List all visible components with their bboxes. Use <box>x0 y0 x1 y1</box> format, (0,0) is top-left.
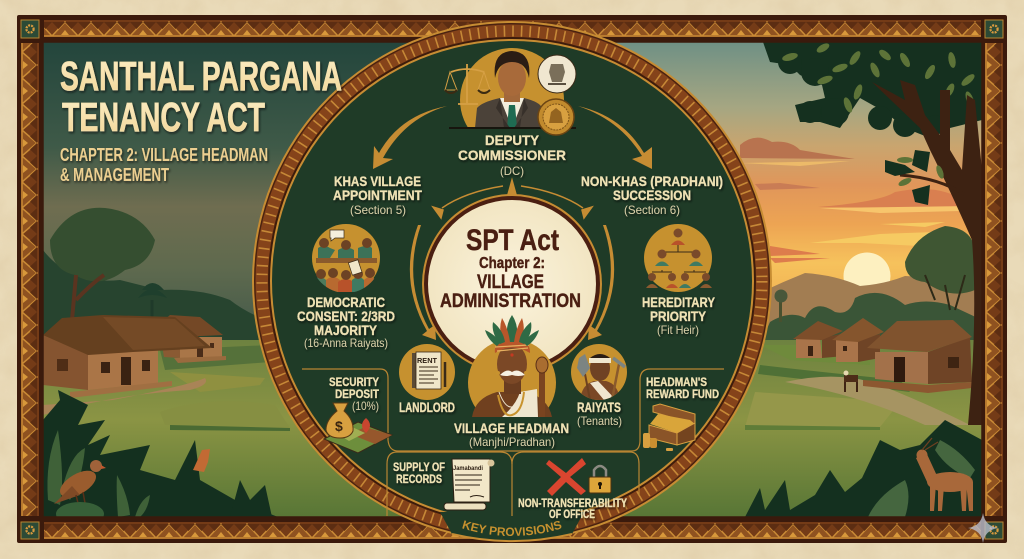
sun <box>844 252 890 286</box>
top pattern band <box>44 20 981 37</box>
label: reward fund <box>646 375 719 401</box>
ring <box>252 21 772 541</box>
provision: supply of records <box>393 459 494 510</box>
label: landlord: LANDLORD <box>399 400 455 415</box>
right main hut <box>863 320 972 393</box>
label: security deposit: SECURITY <box>329 375 379 389</box>
palm right <box>774 290 788 322</box>
label: khas village <box>333 174 423 217</box>
subtitle line one: CHAPTER 2: VILLAGE HEADMAN <box>60 145 268 165</box>
right pattern band <box>985 43 1003 516</box>
label: non-khas: NON-KHAS (PRADHANI) <box>581 174 723 189</box>
large tree canopy <box>763 41 982 138</box>
label: hereditary priority: HEREDITARY <box>642 295 715 310</box>
icon: democratic meeting <box>312 224 380 292</box>
label: security deposit <box>329 375 380 413</box>
central ornament and seal <box>422 180 602 374</box>
label: supply of records: SUPPLY OF <box>393 460 445 474</box>
label: village headman <box>454 421 569 449</box>
scene inner outline <box>43 42 982 517</box>
label: non-khas: (Section 6) <box>624 203 680 217</box>
provision: reward fund <box>643 375 719 451</box>
right hills <box>768 273 974 328</box>
label: raiyats: RAIYATS <box>577 400 621 415</box>
right tree line <box>765 292 974 340</box>
label: raiyats: (Tenants) <box>577 414 622 428</box>
label: non-khas <box>581 174 723 217</box>
landscape scene <box>43 41 982 526</box>
corner ornament top left <box>21 20 39 38</box>
icon: village headman <box>468 315 556 427</box>
title line two: TENANCY ACT <box>62 94 265 140</box>
label: security deposit: DEPOSIT <box>335 387 380 401</box>
right dirt path <box>785 377 970 425</box>
label: supply of records: RECORDS <box>396 472 442 486</box>
label: non-transferability: NON-TRANSFERABILITY <box>518 498 627 510</box>
left hills and tree line <box>44 251 259 340</box>
large tree trunk <box>872 80 982 425</box>
icon: red cross <box>546 458 586 496</box>
rice fields <box>43 340 982 517</box>
left foreground foliage <box>43 390 278 517</box>
label: non-khas: SUCCESSION <box>613 188 691 203</box>
center subheading: Chapter 2: <box>479 255 545 272</box>
palm left <box>139 283 164 316</box>
headdress feathers <box>485 315 539 346</box>
title <box>60 53 342 185</box>
corner ornament top right <box>985 20 1003 38</box>
label: security deposit: (10%) <box>352 399 379 413</box>
label: democratic consent: (16-Anna Raiyats) <box>304 336 388 350</box>
icon: scales <box>445 64 490 104</box>
label: supply of records <box>393 460 445 486</box>
label: khas village: (Section 5) <box>350 203 406 217</box>
icon: treasure chest <box>643 404 695 451</box>
label: democratic consent <box>297 295 395 350</box>
title line one: SANTHAL PARGANA <box>60 53 342 99</box>
label: deputy commissioner <box>458 132 566 178</box>
center title line two: ADMINISTRATION <box>440 291 581 312</box>
left sky <box>44 42 408 315</box>
left hut front <box>43 315 212 398</box>
label: village headman: (Manjhi/Pradhan) <box>469 435 555 449</box>
right foreground foliage <box>745 420 982 517</box>
icon: raiyat farmer <box>571 344 627 400</box>
center title line one: VILLAGE <box>477 272 544 293</box>
corner ornament bottom left <box>21 522 39 539</box>
icon: money bag: $ <box>335 418 343 434</box>
icon: map parcel <box>324 418 392 453</box>
icon: landlord rent book: RENT <box>417 356 437 365</box>
provision: non-transferability <box>518 458 627 521</box>
deer <box>916 438 973 511</box>
provision: security deposit <box>324 375 392 453</box>
grazing animal <box>844 370 858 392</box>
arrow to non-khas <box>578 106 652 169</box>
orange flower <box>193 449 210 472</box>
label: khas village: APPOINTMENT <box>333 188 423 203</box>
label: village headman: VILLAGE HEADMAN <box>454 421 569 436</box>
flow arrows from commissioner <box>373 106 652 340</box>
ornament crest <box>433 180 592 218</box>
icon: sparkle watermark <box>968 513 998 543</box>
label: reward fund: REWARD FUND <box>646 387 719 401</box>
center heading: SPT Act <box>466 224 559 257</box>
arrow to raiyats <box>588 225 614 340</box>
arrow to khas village <box>373 106 447 169</box>
bottom cap over ring <box>440 512 584 541</box>
icon: jamabandi scroll: Jamabandi <box>453 466 483 472</box>
clouds and sun streaks <box>740 138 972 263</box>
center disc <box>422 194 602 374</box>
label: democratic consent: DEMOCRATIC <box>307 295 385 310</box>
left dirt path <box>43 378 206 415</box>
icon: gold coin <box>538 99 574 135</box>
divider label: key provisions: KEY PROVISIONS <box>462 520 562 536</box>
right small huts <box>793 318 884 362</box>
label: deputy commissioner: DEPUTY <box>485 132 540 148</box>
arrow to landlord <box>410 225 436 340</box>
label: non-transferability <box>518 498 627 521</box>
label: khas village: KHAS VILLAGE <box>334 174 421 189</box>
left pattern band <box>21 43 39 516</box>
bird <box>54 460 106 516</box>
icon: landlord rent book <box>399 344 455 400</box>
right sky <box>616 42 982 288</box>
side branch leaves <box>885 150 948 205</box>
label: raiyats <box>577 400 622 428</box>
label: deputy commissioner: (DC) <box>500 164 524 178</box>
label: hereditary priority <box>642 295 715 337</box>
mid tree on right <box>905 226 975 310</box>
field bands <box>160 345 910 431</box>
central circular panel <box>252 21 772 541</box>
label: democratic consent: MAJORITY <box>314 323 377 338</box>
label: reward fund: HEADMAN'S <box>646 375 707 389</box>
label: hereditary priority: PRIORITY <box>650 309 706 324</box>
subtitle line two: & MANAGEMENT <box>60 165 169 185</box>
corner ornament bottom right <box>985 522 1003 539</box>
icon: padlock <box>589 466 611 493</box>
bottom pattern band <box>44 522 981 539</box>
left hut back <box>162 315 226 363</box>
label: democratic consent: CONSENT: 2/3RD <box>297 309 395 324</box>
key provision frames <box>302 369 724 516</box>
label: hereditary priority: (Fit Heir) <box>657 323 699 337</box>
icon: hereditary tree <box>644 224 712 292</box>
left tree canopy <box>50 208 155 320</box>
label: non-transferability: OF OFFICE <box>549 509 595 521</box>
icon: deputy commissioner <box>444 48 576 136</box>
icon: emblem seal <box>538 55 576 93</box>
label: deputy commissioner: COMMISSIONER <box>458 147 566 163</box>
